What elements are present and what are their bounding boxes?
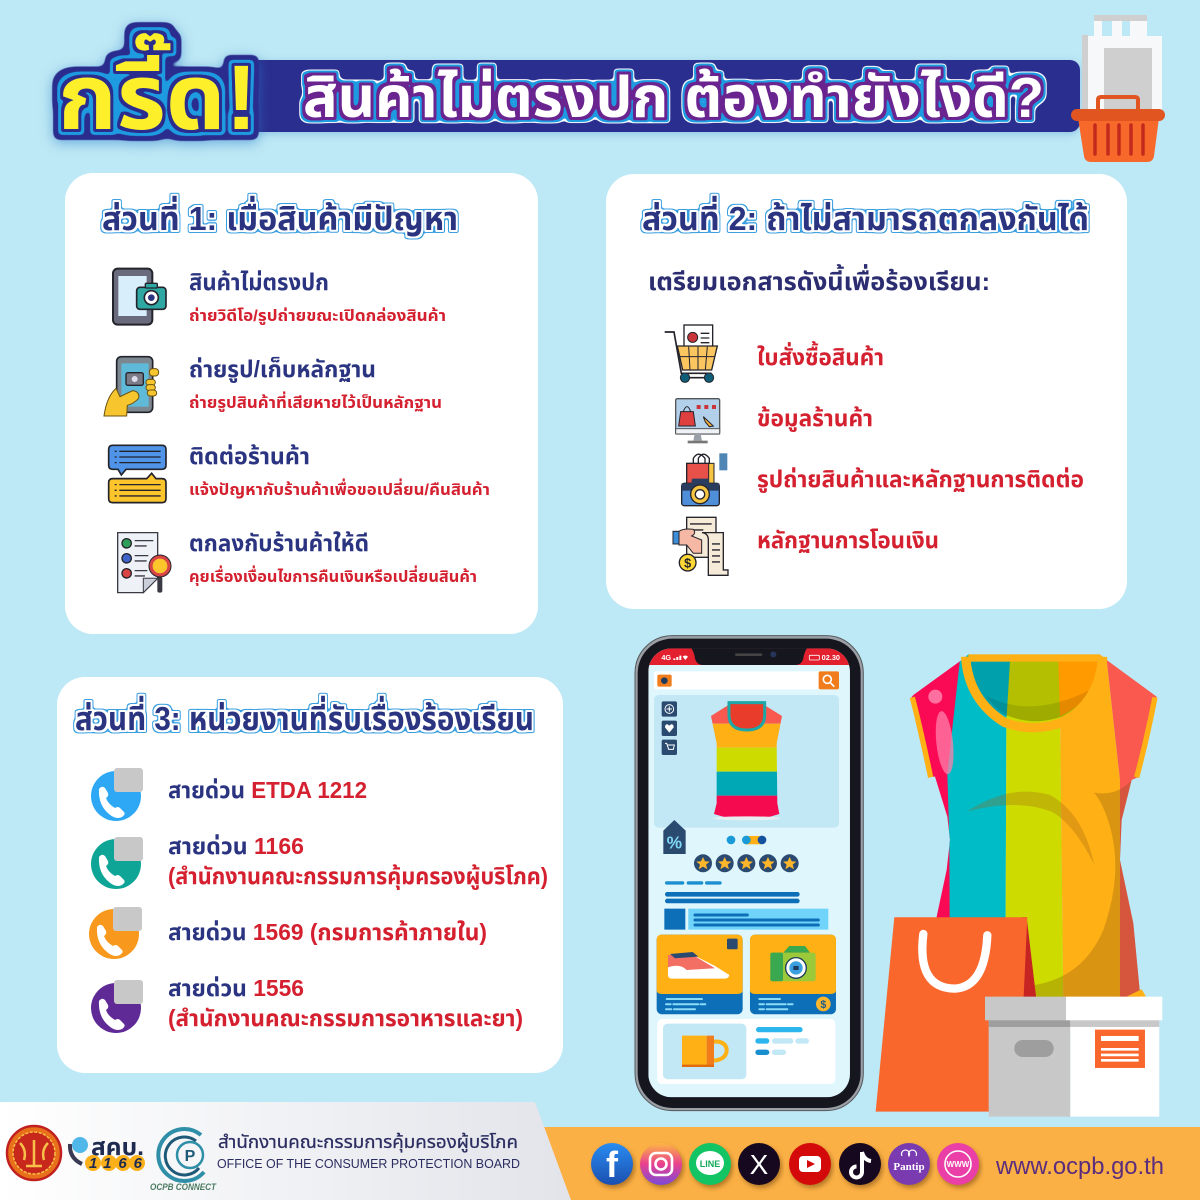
icon: hand holding phone	[104, 357, 159, 416]
icon: instagram	[640, 1143, 682, 1185]
document 2: ข้อมูลร้านค้า	[757, 405, 873, 432]
shirt illustration	[876, 650, 1163, 1117]
icon: line: LINE	[700, 1159, 720, 1169]
logo: OCPB 1166: 1166	[89, 1155, 143, 1172]
smartphone illustration: $	[820, 999, 826, 1011]
icon: phone purple	[91, 980, 143, 1033]
panel: section 1	[65, 173, 538, 634]
item 1 title: สินค้าไม่ตรงปก	[189, 269, 329, 295]
smartphone illustration	[635, 636, 863, 1111]
panel: section 3	[57, 677, 563, 1073]
icon: youtube	[789, 1143, 831, 1185]
organisation name English: OFFICE OF THE CONSUMER PROTECTION BOARD	[217, 1157, 520, 1171]
icon: x	[738, 1143, 780, 1185]
smartphone illustration: %	[667, 832, 682, 852]
main title: กรี๊ด!: กรี๊ด!	[58, 33, 257, 149]
hotline 1166: สายด่วน 1166	[168, 833, 304, 859]
logo: government seal	[7, 1126, 61, 1180]
heading: section 2: ส่วนที่ 2: ถ้าไม่สามารถตกลงกันได้	[642, 195, 1089, 237]
hotline 1569: สายด่วน 1569 (กรมการค้าภายใน)	[168, 919, 487, 945]
icon: tiktok	[839, 1143, 881, 1185]
hotline 1166 agency: (สำนักงานคณะกรรมการคุ้มครองผู้บริโภค)	[168, 863, 548, 890]
icon: phone teal	[91, 837, 143, 889]
icon: cart with order	[665, 325, 717, 382]
icon: phone orange	[89, 907, 142, 959]
subtitle: สินค้าไม่ตรงปก ต้องทำยังไงดี?	[303, 66, 1044, 130]
item 1 detail: ถ่ายวิดีโอ/รูปถ่ายขณะเปิดกล่องสินค้า	[189, 307, 446, 326]
logo: OCPB Connect: P	[185, 1148, 196, 1165]
icon: checklist with magnifier	[118, 533, 171, 593]
heading: section 3: ส่วนที่ 3: หน่วยงานที่รับเรื่องร้องเรียน	[75, 695, 534, 737]
item 2 title: ถ่ายรูป/เก็บหลักฐาน	[189, 356, 376, 383]
logo: OCPB Connect: OCPB CONNECT	[150, 1182, 217, 1192]
smartphone illustration: 4G	[661, 653, 671, 662]
panel: section 2	[606, 174, 1127, 609]
icon: pantip	[888, 1143, 930, 1185]
heading: section 1: ส่วนที่ 1: เมื่อสินค้ามีปัญหา	[102, 195, 458, 237]
intro text: เตรียมเอกสารดังนี้เพื่อร้องเรียน:	[648, 264, 990, 296]
icon: pantip: Pantip	[893, 1161, 925, 1173]
item 2 detail: ถ่ายรูปสินค้าที่เสียหายไว้เป็นหลักฐาน	[189, 391, 442, 413]
social icons	[591, 1143, 979, 1185]
icon: www	[937, 1143, 979, 1185]
item 4 title: ตกลงกับร้านค้าให้ดี	[189, 530, 369, 556]
website: www.ocpb.go.th	[995, 1153, 1164, 1180]
icon: chat bubbles	[109, 445, 166, 503]
item 4 detail: คุยเรื่องเงื่อนไขการคืนเงินหรือเปลี่ยนสินค้า	[189, 565, 477, 586]
icon: x: X	[750, 1149, 769, 1180]
icon: facebook: f	[606, 1144, 619, 1185]
icon: phone blue	[91, 768, 143, 821]
icon: www: WWW	[947, 1160, 970, 1169]
document 4: หลักฐานการโอนเงิน	[757, 527, 939, 553]
logo: OCPB Connect	[150, 1129, 217, 1192]
shopping bag	[876, 917, 1037, 1112]
logo: OCPB 1166: สคบ.	[91, 1134, 144, 1161]
icon: tablet with camera	[113, 269, 166, 325]
title banner	[58, 33, 1080, 149]
icon: payment receipts	[673, 517, 728, 575]
hotline 1556: สายด่วน 1556	[168, 975, 304, 1001]
hotline 1556 agency: (สำนักงานคณะกรรมการอาหารและยา)	[168, 1005, 523, 1031]
document 1: ใบสั่งซื้อสินค้า	[757, 341, 884, 370]
logo: OCPB 1166	[70, 1134, 145, 1172]
document 3: รูปถ่ายสินค้าและหลักฐานการติดต่อ	[757, 466, 1084, 493]
icon: payment receipts: $	[684, 556, 691, 570]
icon: bag and camera	[682, 453, 727, 506]
icon: facebook	[591, 1143, 633, 1185]
smartphone illustration: 02.30	[822, 653, 840, 662]
icon: shopping bag and basket	[1071, 15, 1165, 162]
item 3 title: ติดต่อร้านค้า	[189, 443, 310, 469]
storage boxes	[985, 989, 1162, 1117]
icon: shop monitor	[676, 399, 720, 443]
footer band	[0, 1102, 1200, 1200]
icon: line	[689, 1143, 731, 1185]
organisation name Thai: สำนักงานคณะกรรมการคุ้มครองผู้บริโภค	[218, 1132, 518, 1154]
hotline ETDA: สายด่วน ETDA 1212	[168, 777, 367, 803]
item 3 detail: แจ้งปัญหากับร้านค้าเพื่อขอเปลี่ยน/คืนสินค้า	[189, 478, 490, 499]
